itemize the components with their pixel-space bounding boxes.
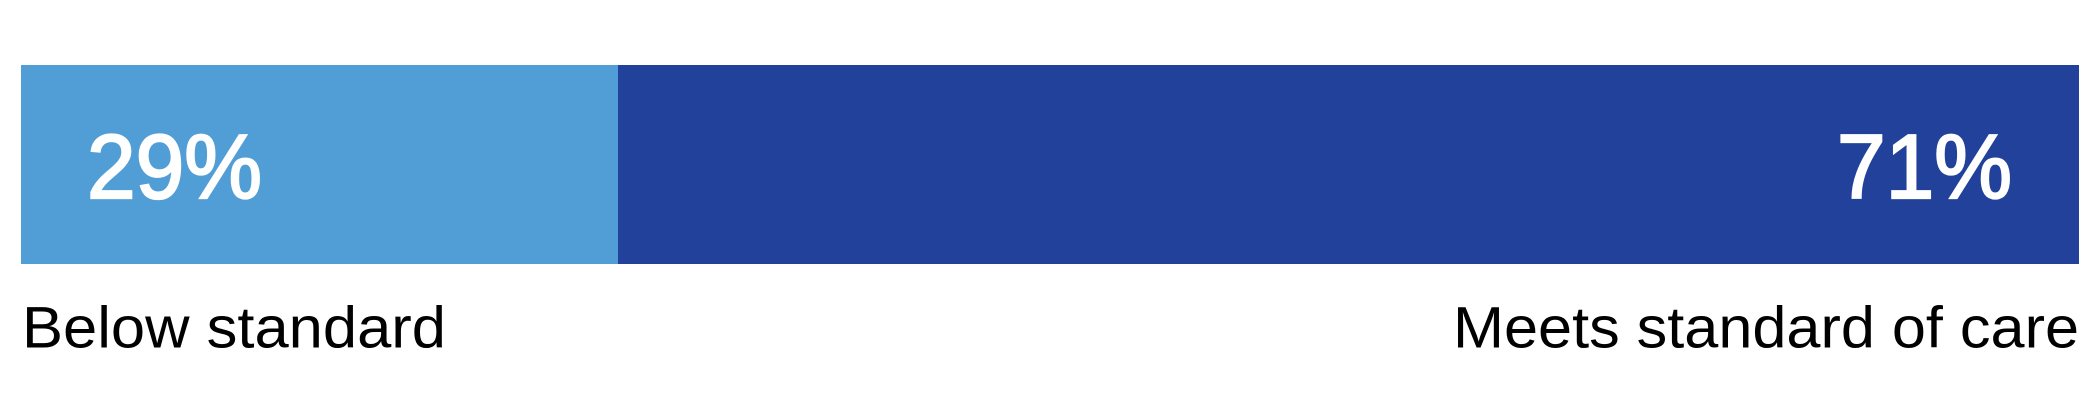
label: below standard: Below standard	[22, 296, 446, 360]
segment: below standard 29%	[21, 65, 618, 264]
segment: below standard 29%: 29%	[87, 117, 262, 218]
label: meets standard of care: Meets standard of care	[1453, 296, 2079, 360]
segment: meets standard 71%: 71%	[1837, 117, 2012, 218]
